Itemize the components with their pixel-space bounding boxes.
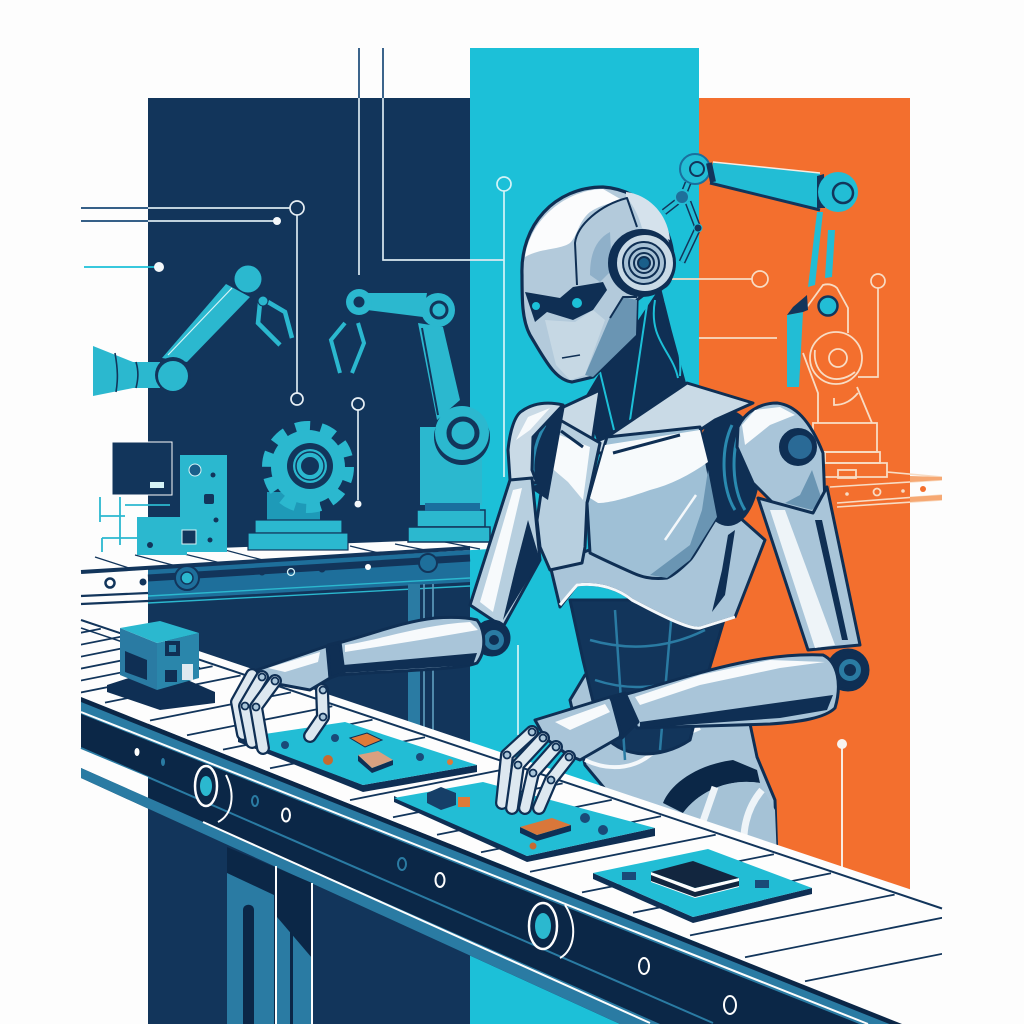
head seams [575, 198, 637, 318]
robot: thigh [683, 782, 777, 860]
right forearm [623, 655, 838, 728]
circuit lines [81, 48, 885, 870]
right fingers [502, 732, 569, 808]
left wrist cuff [328, 642, 344, 678]
robot: right pectoral highlight [590, 430, 708, 503]
right shoulder [737, 403, 825, 513]
right elbow [828, 650, 868, 690]
head shell [522, 187, 673, 382]
left fingers [237, 675, 323, 748]
conveyor rollers [218, 775, 232, 822]
robot: neck cables [600, 300, 680, 430]
conveyor slats [81, 628, 942, 982]
robot arm: centre with claw [331, 289, 490, 542]
faint line robot arm on orange panel [803, 284, 942, 507]
robot: rib armour [550, 500, 765, 628]
mouth [562, 355, 580, 358]
circuit boards on upper shelf [100, 442, 227, 555]
shoulder disc [780, 429, 816, 465]
cube component [107, 621, 215, 710]
white gap under band [81, 749, 148, 798]
right hand back [535, 697, 623, 760]
robot: pectoral shadow [650, 470, 717, 578]
robot: head [522, 187, 675, 382]
left hand back [257, 646, 330, 690]
conveyor top [81, 620, 942, 1024]
head side shade [590, 232, 612, 282]
ear [609, 230, 675, 296]
circuit board 3 [593, 849, 812, 923]
eyes [532, 298, 582, 310]
conveyor inner line [81, 748, 713, 1023]
left elbow [475, 621, 509, 655]
circuit board 2 [394, 782, 655, 862]
robot: waist bands [590, 610, 705, 760]
robot arm: left with claw [93, 266, 292, 396]
robot: hip highlight [585, 728, 700, 767]
robot: torso behind conveyor [537, 290, 777, 860]
robot: neck [585, 290, 690, 445]
conveyor bolts [282, 808, 736, 1014]
left forearm [338, 617, 484, 675]
robot: right pectoral [587, 427, 717, 579]
upper conveyor leg [408, 584, 433, 730]
head highlight [525, 189, 622, 257]
robot: thigh groove [663, 760, 760, 813]
robot: waist [570, 600, 730, 754]
left knuckles [242, 674, 326, 720]
right knuckles [504, 728, 572, 784]
robot arm on orange panel [664, 154, 858, 387]
robot: arms [237, 403, 868, 808]
head face plane [545, 310, 605, 380]
conveyor lower strip [81, 768, 660, 1024]
main conveyor [80, 619, 942, 1024]
background panels [148, 48, 910, 1024]
left shoulder [508, 403, 563, 483]
left upper arm [470, 478, 540, 627]
right wrist cuff [611, 693, 638, 738]
visor [525, 282, 607, 322]
circuit board 1 [238, 722, 477, 792]
robot: shoulder socket right [696, 410, 760, 526]
robot: chest slits [561, 431, 680, 453]
gear on pedestal [248, 428, 348, 550]
left shoulder socket [533, 405, 565, 500]
robot: left pectoral [537, 420, 600, 570]
head jaw shade [585, 297, 637, 377]
upper conveyor [81, 538, 490, 604]
conveyor side band [81, 697, 902, 1024]
head back highlight [626, 192, 670, 240]
robot: hips [570, 675, 777, 860]
robot: left pectoral highlight [548, 432, 590, 500]
right upper arm [758, 487, 860, 650]
conveyor rail [148, 634, 942, 908]
robot: collar [557, 383, 753, 455]
lower support structure [227, 847, 312, 1024]
